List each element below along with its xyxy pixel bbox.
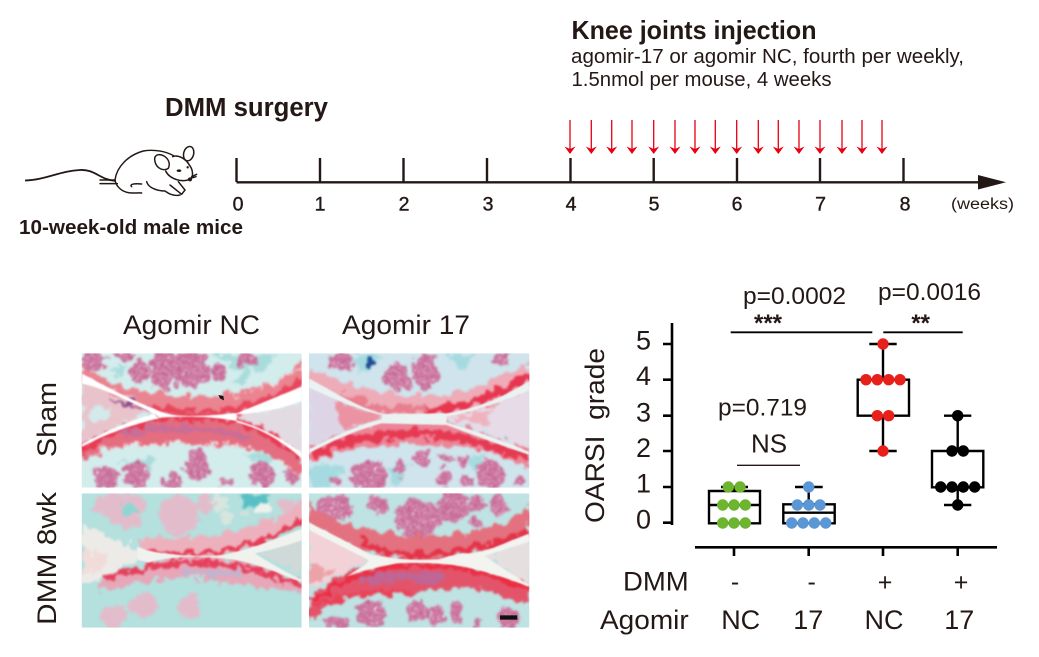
panel: DMM 8wk Agomir 17 histology (309, 491, 529, 630)
y-axis title: OARSI grade (580, 348, 610, 523)
group labels: Agomir row: NC (721, 605, 760, 635)
text: injection regimen: 1.5nmol per mouse, 4 weeks (572, 69, 832, 91)
box: DMM+ 17 (932, 410, 983, 511)
panel: DMM 8wk Agomir NC histology (82, 493, 303, 629)
week numbers: 8 (900, 194, 910, 216)
tibia cartilage (309, 420, 529, 468)
significance: p=0.719 NS: p=0.719 (718, 395, 807, 422)
femur cartilage (140, 502, 302, 558)
group labels: DMM row: - (808, 568, 816, 596)
femur cartilage (82, 358, 302, 418)
y-axis: 3 (636, 398, 651, 428)
timeline axis (233, 158, 1014, 216)
week numbers: 7 (815, 194, 826, 216)
column heading: Agomir NC: Agomir NC (123, 310, 260, 340)
week numbers: 4 (566, 194, 577, 216)
y-axis (636, 323, 672, 534)
timeline arrow head (978, 175, 1006, 190)
column heading: Agomir 17: Agomir 17 (342, 310, 470, 340)
significance: p=0.0002 (731, 283, 872, 337)
icon: mouse body (100, 145, 197, 195)
group labels: Agomir row: 17 (944, 605, 974, 635)
group labels: DMM row: - (731, 568, 739, 596)
joint gap (309, 378, 529, 455)
mouse illustration (25, 145, 197, 195)
row label: Sham: Sham (32, 382, 62, 457)
artifact speck (218, 395, 224, 400)
group labels: Agomir row: 17 (793, 605, 823, 635)
week numbers: 3 (483, 194, 493, 216)
y-axis: 5 (636, 325, 651, 355)
box: DMM+ NC (858, 338, 909, 457)
significance: p=0.0016: p=0.0016 (878, 279, 981, 306)
left meniscus (309, 390, 345, 446)
group labels: DMM row (623, 567, 968, 597)
weeks unit: (weeks) (951, 196, 1014, 213)
y-axis: 4 (636, 361, 651, 391)
panel: Sham Agomir NC histology (82, 348, 302, 490)
week numbers (233, 194, 910, 216)
femur cartilage (309, 360, 529, 418)
tibia cartilage (98, 556, 302, 593)
group labels: Agomir row: Agomir (600, 605, 689, 635)
significance: p=0.719 NS (718, 395, 807, 465)
box: DMM- NC (709, 481, 760, 529)
femur cartilage (309, 500, 529, 561)
week numbers: 6 (732, 194, 742, 216)
panel: Sham Agomir 17 histology (309, 352, 529, 492)
right meniscus (447, 387, 529, 450)
y-axis: 2 (636, 433, 651, 463)
right meniscus (240, 403, 302, 452)
significance: p=0.719 NS: NS (751, 429, 787, 459)
scale bar (500, 615, 517, 620)
group labels: Agomir row: NC (864, 605, 904, 635)
right meniscus (257, 538, 302, 574)
x-axis (695, 547, 997, 556)
y-axis: 0 (636, 504, 651, 534)
injection arrows (564, 120, 888, 154)
joint gap (309, 522, 529, 587)
tibia cartilage (82, 415, 302, 478)
text: injection regimen: agomir-17 or agomir NC, fourth per weekly, (571, 46, 964, 68)
group labels: DMM row: + (954, 568, 968, 596)
week numbers: 0 (233, 194, 244, 216)
week numbers: 5 (649, 194, 660, 216)
group labels: DMM row: DMM (623, 567, 689, 597)
joint gap (137, 529, 302, 582)
y-axis: 1 (636, 469, 651, 499)
significance: p=0.0016 (878, 279, 981, 337)
tibia cartilage (309, 560, 529, 618)
icon: mouse tail (25, 170, 116, 181)
group labels: Agomir row (600, 605, 974, 635)
label: mice: 10-week-old male mice (19, 216, 243, 239)
left meniscus (82, 384, 150, 444)
week numbers: 2 (399, 194, 409, 216)
significance: p=0.0002: *** (754, 310, 783, 337)
heading: knee joints injection: Knee joints injection (572, 15, 816, 45)
right meniscus (485, 538, 529, 586)
joint gap (82, 373, 302, 458)
heading: DMM surgery: DMM surgery (165, 94, 329, 122)
significance: p=0.0016: ** (911, 310, 931, 337)
text: injection regimen (571, 46, 964, 91)
chart: OARSI grade box plot (580, 279, 997, 635)
row label: DMM 8wk: DMM 8wk (32, 491, 62, 625)
significance: p=0.0002: p=0.0002 (743, 283, 846, 310)
left meniscus (309, 527, 368, 590)
group labels: DMM row: + (878, 568, 892, 596)
week numbers: 1 (315, 194, 325, 216)
box: DMM- 17 (783, 481, 835, 529)
